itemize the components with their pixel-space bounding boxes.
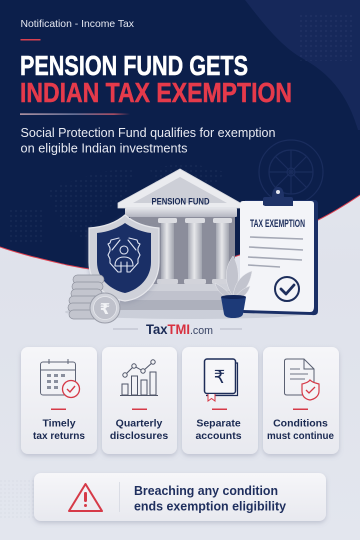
clipboard text lines: [248, 237, 303, 267]
warning callout: [34, 473, 326, 521]
label: [110, 418, 168, 442]
label: Separate: [196, 418, 241, 430]
decorative world map: [48, 163, 225, 240]
label: disclosures: [110, 430, 168, 442]
icon: hands and person: [108, 238, 140, 272]
subtitle: Social Protection Fund qualifies for exemption: [20, 125, 276, 140]
label: accounts: [195, 430, 242, 442]
title: PENSION FUND GETS: [20, 50, 248, 81]
label: Conditions: [273, 418, 328, 430]
icon: warning triangle: [69, 484, 102, 511]
callout text: [134, 483, 287, 514]
icon: protection shield: [89, 215, 159, 301]
brand logo: [113, 322, 242, 337]
subtitle: [20, 125, 276, 156]
illustration: clipboard: [239, 187, 318, 315]
label: Quarterly: [116, 418, 163, 430]
pediment: [118, 169, 242, 208]
icon: rupee coins: [68, 275, 120, 323]
card: timely tax returns: [21, 347, 97, 454]
building label: PENSION FUND: [152, 196, 210, 208]
title: [20, 50, 292, 108]
card: separate accounts: [182, 347, 258, 454]
subtitle: on eligible Indian investments: [20, 140, 188, 156]
icon: bar and line chart: [120, 360, 158, 396]
title: INDIAN TAX EXEMPTION: [20, 77, 292, 108]
icon: rupee coins: ₹: [100, 300, 110, 318]
label: [195, 418, 242, 442]
decorative dots lower left: [0, 480, 34, 520]
icon: check circle: [275, 277, 299, 301]
divider under title: [20, 114, 130, 115]
navy header with red curved edge: [0, 0, 360, 273]
clipboard clip: [263, 187, 293, 206]
card: quarterly disclosures: [102, 347, 177, 454]
brand logo: TaxTMI.com: [146, 322, 213, 337]
callout text: ends exemption eligibility: [134, 498, 287, 514]
icon: potted plant: [215, 256, 252, 318]
card: conditions must continue: [263, 347, 339, 454]
illustration: pension fund building: [65, 169, 315, 319]
label: Timely: [42, 418, 76, 430]
icon: rupee ledger: ₹: [214, 367, 225, 388]
columns: [157, 218, 233, 284]
clipboard heading: TAX EXEMPTION: [250, 218, 305, 230]
decorative Ashoka wheel: [259, 140, 323, 204]
top label: Notification - Income Tax: [20, 19, 135, 30]
callout text: Breaching any condition: [134, 483, 278, 498]
icon: document with shield: [284, 359, 319, 400]
red accent line: [20, 39, 40, 40]
label: [267, 418, 334, 442]
label: [33, 418, 85, 442]
steps: [120, 284, 238, 310]
label: must continue: [267, 430, 334, 442]
icon: calendar: [40, 359, 80, 398]
label: tax returns: [33, 430, 85, 442]
